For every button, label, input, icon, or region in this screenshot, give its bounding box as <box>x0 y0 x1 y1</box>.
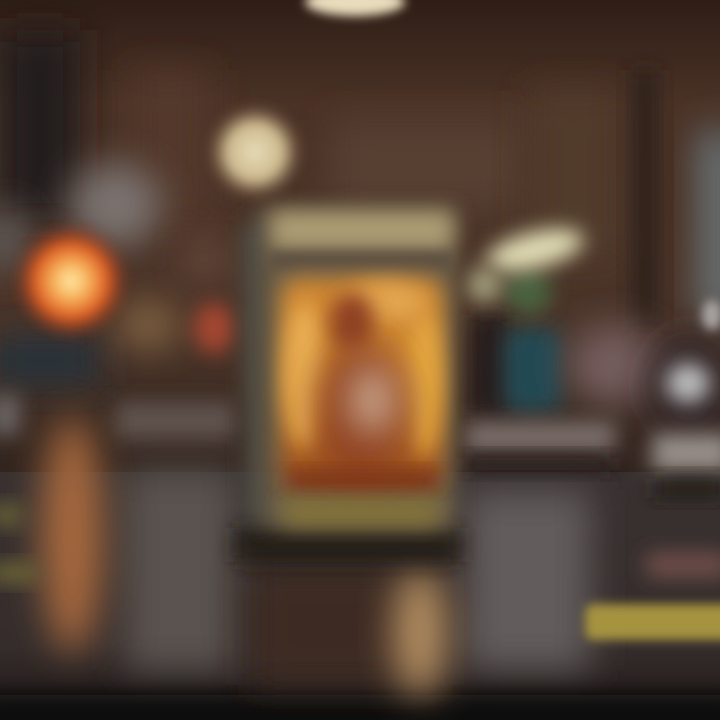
artwork top glow <box>343 282 427 322</box>
orange reflection on table <box>40 417 104 653</box>
box reflection on table <box>250 565 448 696</box>
pendant lamp <box>205 102 305 202</box>
box bottom band <box>284 500 438 526</box>
box shadow <box>235 528 460 562</box>
dark bottle shadow <box>470 315 510 415</box>
artwork pale figure <box>348 364 396 436</box>
pink and yellow strips on table <box>585 552 720 640</box>
green bottle neck <box>504 270 552 314</box>
glowing orange orb <box>11 221 131 341</box>
table surface <box>0 470 720 720</box>
box side panel <box>242 208 270 522</box>
pink-grey object <box>567 325 663 405</box>
box front <box>264 208 456 528</box>
box dark stripe <box>270 252 452 270</box>
artwork lower red band <box>288 472 438 490</box>
product box <box>235 208 460 562</box>
bright bottle highlight <box>482 220 588 280</box>
right-side objects <box>465 220 720 498</box>
box artwork <box>281 278 443 486</box>
artwork left glow <box>285 303 325 447</box>
yellow reflections at left edge <box>0 505 38 582</box>
teal bottle <box>504 328 562 412</box>
box header band <box>272 212 452 248</box>
window glow at right edge <box>698 130 720 320</box>
background: wooden wall <box>0 0 720 480</box>
left background objects <box>0 163 235 440</box>
artwork right glow <box>408 313 440 457</box>
grey shelf <box>465 422 615 452</box>
dark right object <box>650 335 720 435</box>
ceiling light <box>305 0 405 16</box>
artwork red figure <box>316 340 408 480</box>
white highlight <box>666 363 710 403</box>
